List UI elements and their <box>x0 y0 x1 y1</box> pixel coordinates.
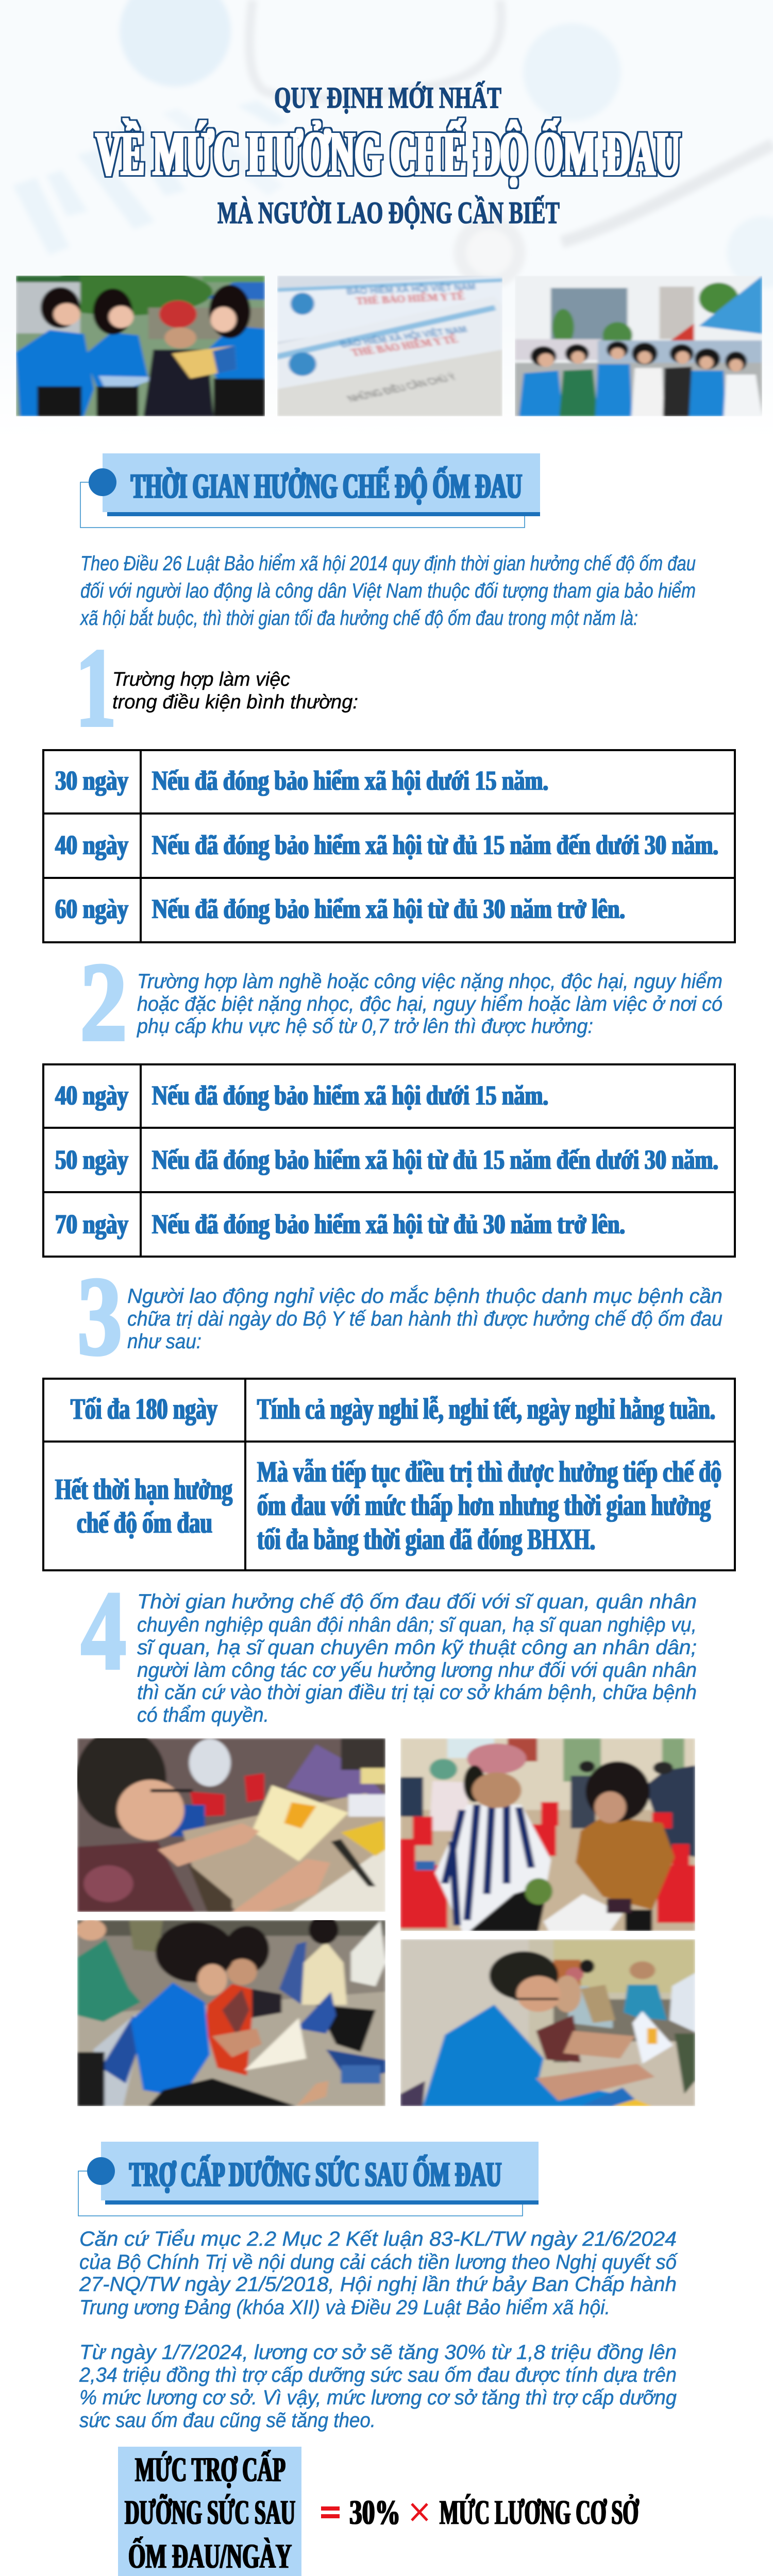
salary increase paragraph: Từ ngày 1/7/2024, lương cơ sở sẽ tăng 30% từ 1,8 triệu đồng lên <box>79 2341 677 2364</box>
photo: officer guiding with brochure <box>400 1939 695 2106</box>
case 2 text <box>137 970 722 1038</box>
case 4 text: Thời gian hưởng chế độ ốm đau đối với sĩ quan, quân nhân <box>137 1590 697 1613</box>
table 2: 70 ngày <box>55 1209 128 1240</box>
top photo row <box>16 268 762 416</box>
formula: MỨC LƯƠNG CƠ SỞ <box>440 2493 639 2532</box>
photo: health insurance cards: BẢO HIỂM XÃ HỘI VIỆT NAM <box>339 324 469 349</box>
table 1: 30 ngày <box>55 765 128 796</box>
photo: woman reading brochure <box>77 1738 385 1912</box>
case 1 text <box>112 669 358 713</box>
photo collage <box>75 1728 695 2106</box>
table 2 <box>43 1064 735 1257</box>
legal basis paragraph: của Bộ Chính Trị về nội dung cải cách tiền lương theo Nghị quyết số <box>79 2251 679 2274</box>
photo: health insurance cards: THẺ BẢO HIỂM Y TẾ <box>349 333 460 359</box>
section heading: trợ cấp dưỡng sức sau ốm đau <box>78 2142 539 2216</box>
photo: health insurance cards: THẺ BẢO HIỂM Y TẾ <box>355 290 465 307</box>
table 1: Nếu đã đóng bảo hiểm xã hội dưới 15 năm. <box>152 765 548 796</box>
case 4 text: có thẩm quyền. <box>137 1704 269 1726</box>
table 1: 60 ngày <box>55 893 128 924</box>
case 4 text: thì căn cứ vào thời gian điều trị tại cơ sở khám bệnh, chữa bệnh <box>137 1681 697 1704</box>
table 2: Nếu đã đóng bảo hiểm xã hội dưới 15 năm. <box>152 1080 548 1111</box>
photo: health insurance cards: BẢO HIỂM XÃ HỘI VIỆT NAM <box>346 281 476 297</box>
case 3 text: Người lao động nghỉ việc do mắc bệnh thuộc danh mục bệnh cần <box>127 1284 722 1308</box>
legal basis paragraph: Căn cứ Tiểu mục 2.2 Mục 2 Kết luận 83-KL/TW ngày 21/6/2024 <box>79 2228 677 2250</box>
formula label box: DƯỠNG SỨC SAU <box>125 2493 295 2532</box>
formula label box: MỨC TRỢ CẤP <box>135 2450 285 2489</box>
formula label box: ỐM ĐAU/NGÀY <box>128 2536 292 2575</box>
case 4 text: sĩ quan, hạ sĩ quan chuyên môn kỹ thuật công an nhân dân; <box>137 1636 697 1659</box>
table 2: 40 ngày <box>55 1080 128 1111</box>
salary increase paragraph <box>79 2341 677 2432</box>
case 3 text: như sau: <box>127 1330 201 1353</box>
salary increase paragraph: 2,34 triệu đồng thì trợ cấp dưỡng sức sau ốm đau được tính dựa trên <box>79 2364 677 2386</box>
photo: officer guiding woman seated on chairs <box>77 1920 385 2106</box>
case 3 number: 3 <box>77 1255 122 1379</box>
formula <box>321 2493 639 2532</box>
photo: health insurance cards <box>277 276 502 416</box>
case 1 text: Trường hợp làm việc <box>112 669 290 690</box>
legal basis paragraph: 27-NQ/TW ngày 21/5/2018, Hội nghị lần thứ bảy Ban Chấp hành <box>79 2273 677 2296</box>
intro paragraph <box>79 552 696 630</box>
formula: 30% <box>349 2493 400 2532</box>
title line 3: MÀ NGƯỜI LAO ĐỘNG CẦN BIẾT <box>217 196 560 230</box>
title line 1: QUY ĐỊNH MỚI NHẤT <box>274 81 501 114</box>
case 4 text <box>137 1590 697 1726</box>
case 2 text: hoặc đặc biệt nặng nhọc, độc hại, nguy hiểm hoặc làm việc ở nơi có <box>137 993 722 1015</box>
salary increase paragraph: sức sau ốm đau cũng sẽ tăng theo. <box>79 2409 376 2432</box>
photo: group at street booth <box>515 276 762 416</box>
table 3: tối đa bằng thời gian đã đóng BHXH. <box>257 1522 595 1556</box>
legal basis paragraph: Trung ương Đảng (khóa XII) và Điều 29 Luật Bảo hiểm xã hội. <box>79 2296 610 2319</box>
section heading: thời gian hưởng chế độ ốm đau <box>80 453 540 528</box>
case 2 number: 2 <box>80 940 127 1064</box>
table 3: chế độ ốm đau <box>77 1506 212 1539</box>
table 3 <box>43 1379 735 1570</box>
legal basis paragraph <box>79 2228 679 2319</box>
case 1 text: trong điều kiện bình thường: <box>112 691 358 713</box>
case 2 text: phụ cấp khu vực hệ số từ 0,7 trở lên thì được hưởng: <box>137 1015 593 1038</box>
salary increase paragraph: % mức lương cơ sở. Vì vậy, mức lương cơ sở tăng thì trợ cấp dưỡng <box>79 2386 677 2409</box>
case 4 text: người làm công tác cơ yếu hưởng lương như đối với quân nhân <box>137 1659 697 1682</box>
table 2: 50 ngày <box>55 1144 128 1175</box>
photo: women with red stools <box>400 1738 695 1931</box>
header background: stethoscope and charts <box>0 0 773 440</box>
case 4 text: chuyên nghiệp quân đội nhân dân; sĩ quan, hạ sĩ quan nghiệp vụ, <box>137 1614 697 1636</box>
table 3: Hết thời hạn hưởng <box>55 1472 232 1506</box>
formula label box <box>118 2447 301 2576</box>
table 2: Nếu đã đóng bảo hiểm xã hội từ đủ 30 năm trở lên. <box>152 1209 625 1240</box>
title <box>96 81 680 230</box>
section heading: thời gian hưởng chế độ ốm đau: THỜI GIAN HƯỞNG CHẾ ĐỘ ỐM ĐAU <box>131 466 522 505</box>
case 4 number: 4 <box>81 1569 126 1693</box>
photo: health insurance cards: NHỮNG ĐIỀU CẦN CHÚ Ý <box>344 371 459 404</box>
case 3 text <box>127 1284 722 1353</box>
table 1 <box>43 750 735 942</box>
case 1 number: 1 <box>75 626 116 750</box>
table 1: 40 ngày <box>55 829 128 860</box>
table 1: Nếu đã đóng bảo hiểm xã hội từ đủ 30 năm trở lên. <box>152 893 625 924</box>
table 3: Tối đa 180 ngày <box>71 1392 217 1426</box>
photo: officers with elderly woman <box>16 276 265 416</box>
intro paragraph: xã hội bắt buộc, thì thời gian tối đa hưởng chế độ ốm đau trong một năm là: <box>79 606 638 630</box>
case 2 text: Trường hợp làm nghề hoặc công việc nặng nhọc, độc hại, nguy hiểm <box>137 970 722 993</box>
section heading: trợ cấp dưỡng sức sau ốm đau: TRỢ CẤP DƯỠNG SỨC SAU ỐM ĐAU <box>129 2155 501 2194</box>
case 3 text: chữa trị dài ngày do Bộ Y tế ban hành thì được hưởng chế độ ốm đau <box>127 1308 722 1330</box>
